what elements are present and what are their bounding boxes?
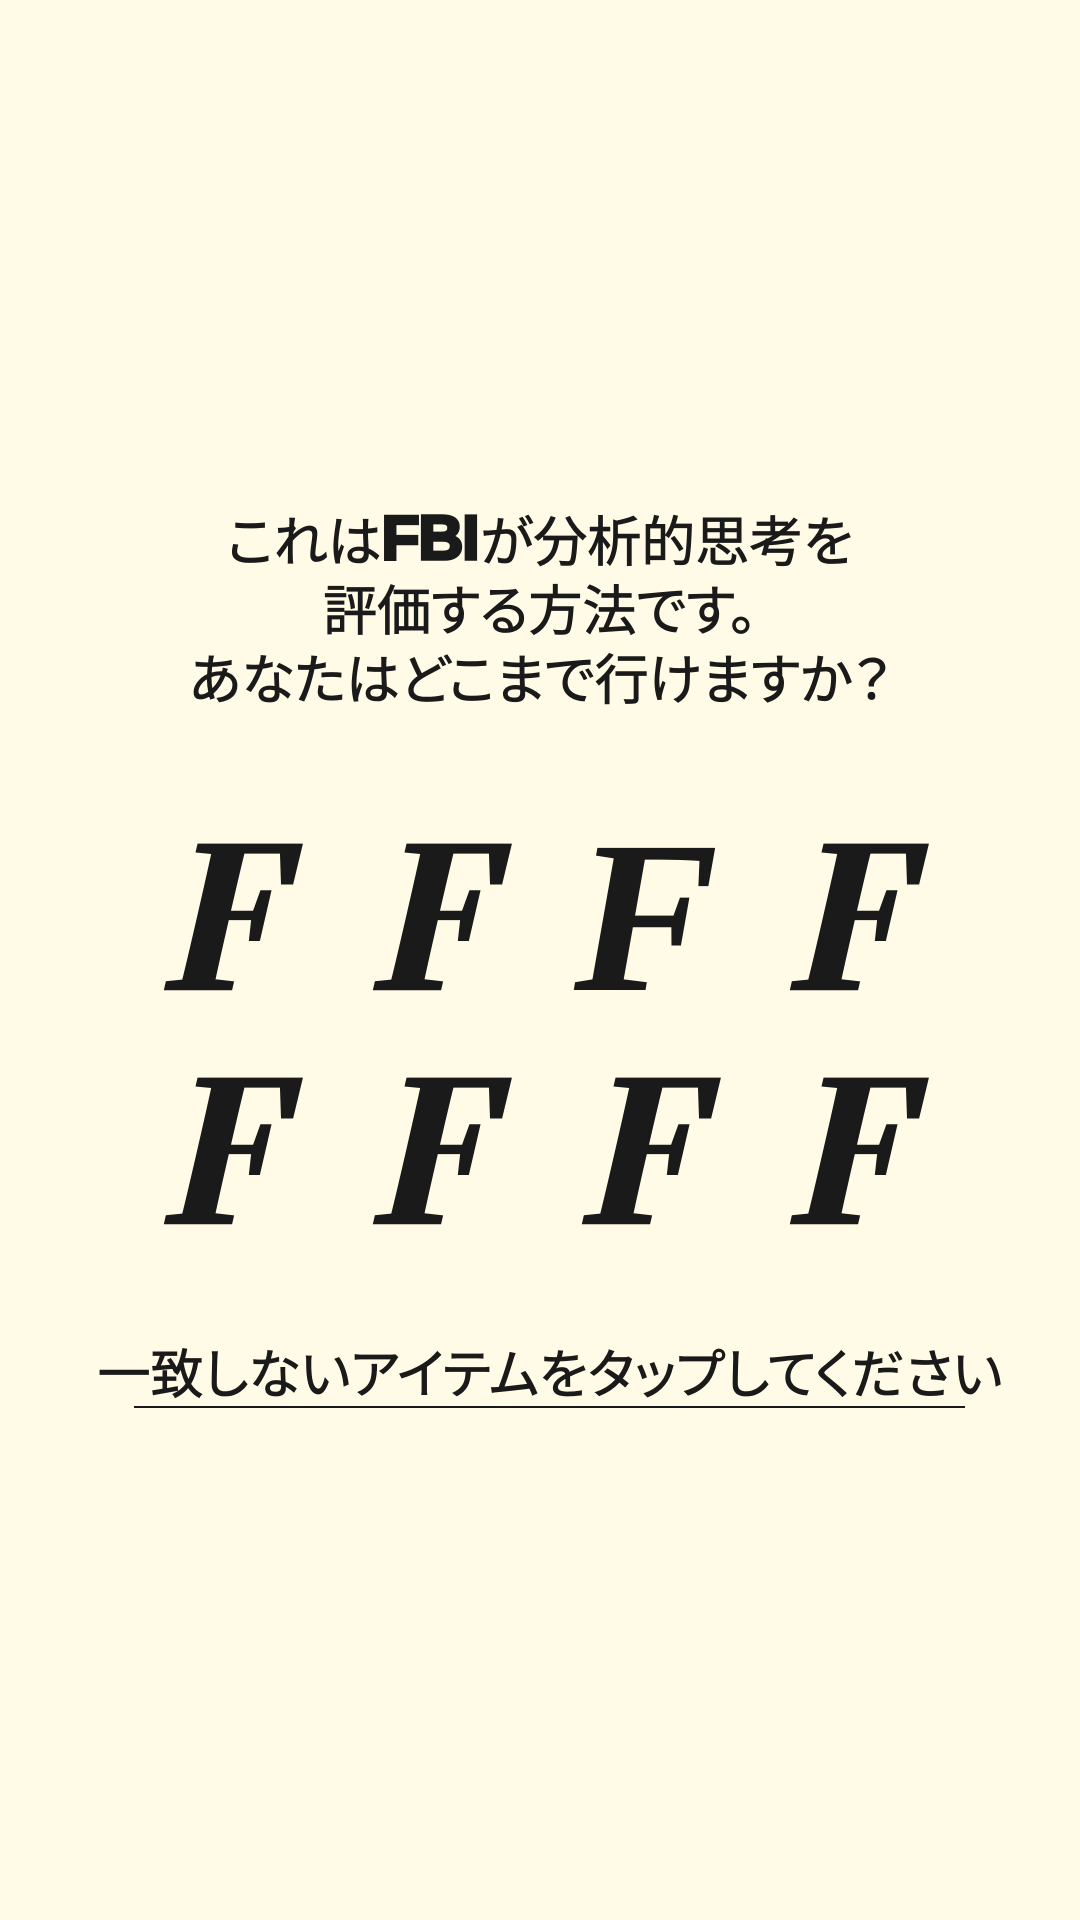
puzzle grid of letter F: [158, 800, 929, 1260]
title: FBI analytical thinking question: これはFBIが分析的思考を: [227, 504, 853, 573]
title: FBI analytical thinking question: [189, 504, 891, 711]
title: FBI analytical thinking question: 評価する方法です。: [323, 582, 757, 642]
title: FBI analytical thinking question: あなたはどこまで行けますか？: [189, 651, 891, 711]
odd letter F, row 1 column 3: F: [573, 800, 719, 1037]
underline below instruction: [134, 1406, 965, 1408]
instruction text: 一致しないアイテムをタップしてください: [98, 1346, 1002, 1405]
